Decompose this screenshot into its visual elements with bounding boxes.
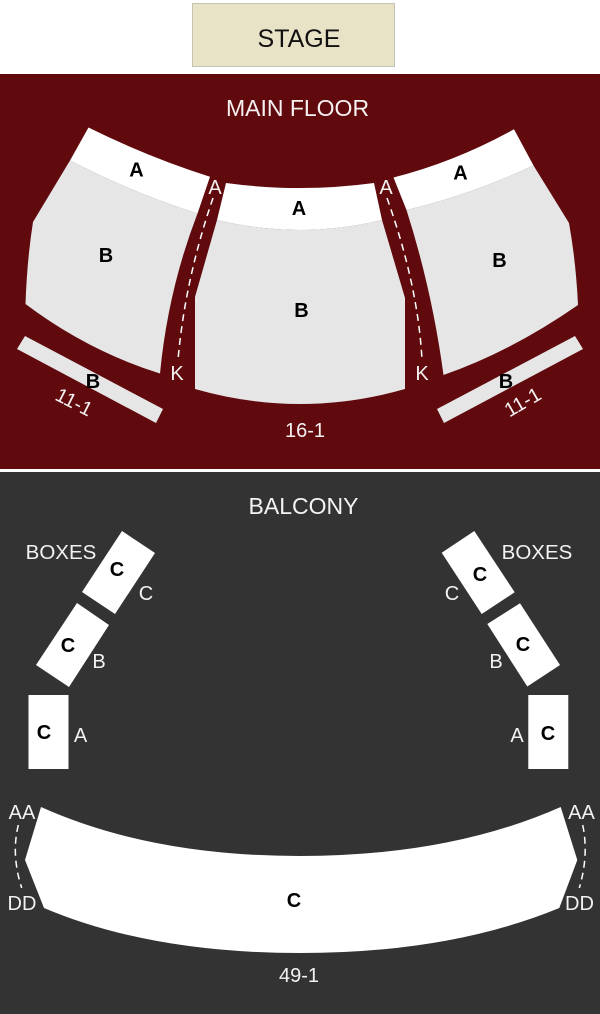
right balcony row labels: AA [568,802,595,824]
right aisle row labels: A [379,177,393,199]
box: right B: C [516,634,530,656]
panel: main floor [0,74,600,469]
section: center orchestra: B [294,300,309,322]
heading: main floor: MAIN FLOOR [226,95,369,121]
right balcony row labels: DD [565,893,594,915]
stage [192,4,394,66]
box: left A: C [37,722,51,744]
box: left C [82,531,155,614]
left aisle row labels: A [208,177,222,199]
section: balcony: C [287,890,301,912]
left aisle row labels: K [170,363,184,385]
section: left rear strip: B [86,371,100,393]
box: right A [510,695,568,769]
right boxes label: BOXES [502,541,572,564]
left balcony row labels [8,802,36,915]
section: right rear strip [437,336,583,423]
right aisle row labels: K [415,363,429,385]
right balcony row labels [565,802,595,915]
box: left A: A [74,725,88,747]
section: left orchestra: A [129,160,144,182]
box: right C [442,531,515,614]
box: left B [36,603,109,687]
section: center orchestra [195,183,405,404]
seat number: center: 16-1 [285,420,325,442]
left balcony row labels: DD [8,893,36,915]
section: balcony [25,807,577,953]
section: left orchestra: B [99,245,113,267]
seat number: balcony: 49-1 [279,965,319,987]
seat number: right: 11-1 [501,384,545,422]
box: left B: C [61,635,75,657]
left aisle row labels [170,177,222,385]
box: left C: C [139,583,153,605]
box: right A: A [510,725,524,747]
section: right orchestra: B [492,250,507,272]
section: left rear strip [17,336,163,423]
section: left orchestra [26,128,210,374]
left balcony row labels: AA [9,802,36,824]
right aisle row labels [379,177,429,385]
heading: balcony: BALCONY [249,493,358,519]
box: left C: C [110,559,124,581]
box: right A: C [541,723,555,745]
panel: balcony [0,472,600,1014]
section: right rear strip: B [499,371,513,393]
stage: STAGE [258,25,340,53]
box: left B: B [92,651,106,673]
box: left A [28,695,88,769]
section: right orchestra: A [453,162,468,184]
seat number: left: 11-1 [52,384,96,421]
box: right B: B [489,651,503,673]
section: right orchestra [394,129,578,375]
left boxes label: BOXES [26,541,96,564]
section: center orchestra: A [292,198,306,220]
box: right C: C [445,583,459,605]
box: right C: C [473,564,487,586]
box: right B [487,603,560,686]
